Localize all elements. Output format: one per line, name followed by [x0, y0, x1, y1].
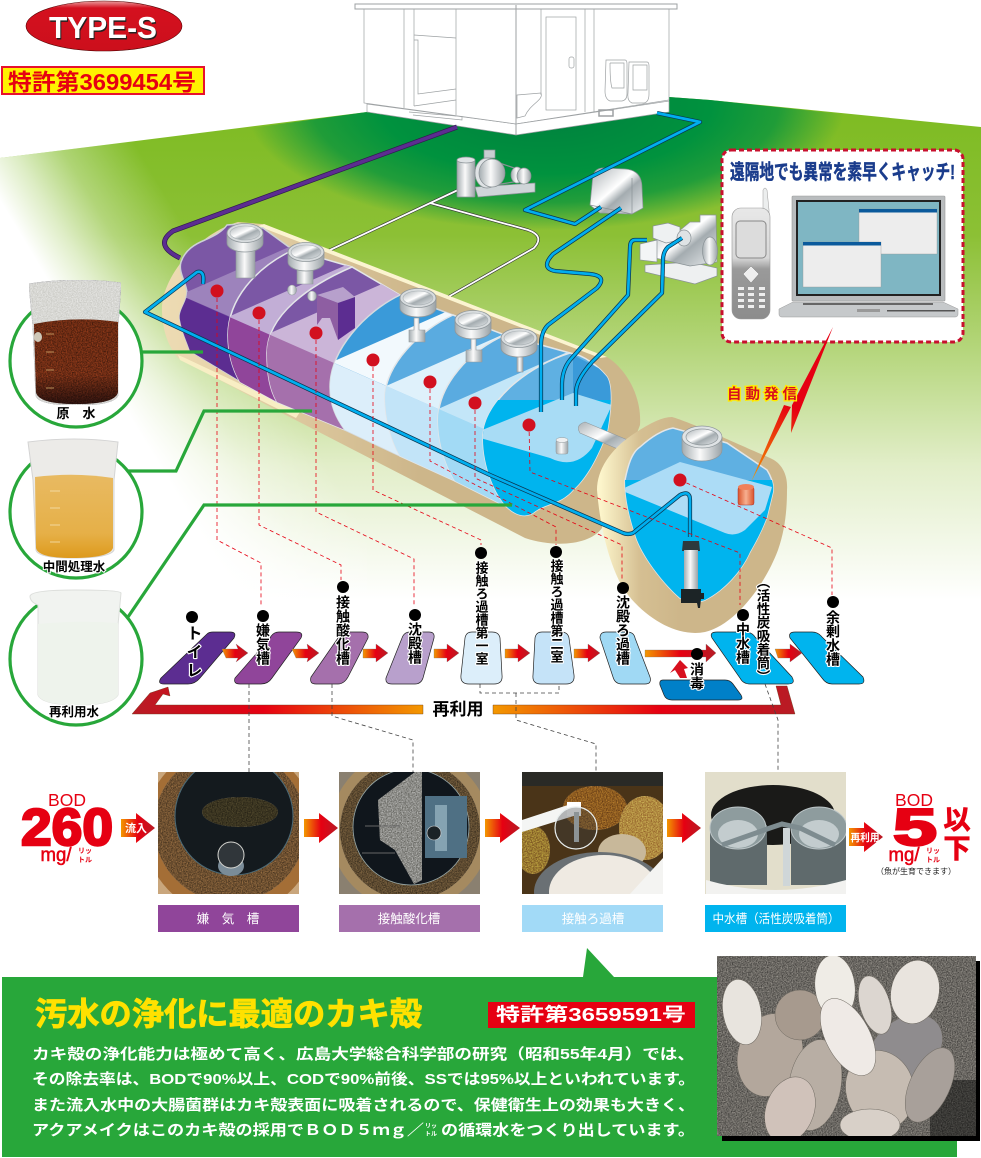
tank chamber 1: raw inflow [179, 223, 290, 381]
tank chamber 5 [384, 314, 503, 482]
panel body text [32, 1045, 695, 1139]
arrow: photo 3 to 4 [667, 813, 701, 843]
remote monitoring callout [722, 150, 963, 342]
panel: oyster shell purification [2, 948, 957, 1157]
flow shape: toilet [160, 632, 235, 684]
patent number badge: 特許第3659591号 [496, 1004, 686, 1025]
arrow: inflow: 流入 [125, 821, 147, 835]
manhole cap 1 [227, 224, 263, 252]
panel body text: また流入水中の大腸菌群はカキ殻表面に吸着されるので、保健衛生上の効果も大きく、 [32, 1096, 695, 1114]
blower unit 1 [457, 150, 535, 197]
flow label: anaerobic tank: 嫌気槽 [255, 622, 271, 666]
panel body text: の循環水をつくり出しています。 [441, 1121, 695, 1139]
beaker: reuse water [10, 590, 142, 725]
flow shape: settling filtration tank [600, 632, 650, 684]
ground pipes: white conduit lines [330, 190, 538, 297]
photo caption: contact oxidation tank [339, 905, 480, 932]
flow shape: contact filtration room 1 [461, 632, 502, 684]
tank chamber 7 [482, 352, 612, 516]
flow shape: contact oxidation tank [311, 632, 368, 684]
outflow BOD figure [876, 790, 970, 876]
small tank manhole [682, 426, 722, 461]
flow shape: surplus water tank [790, 632, 864, 684]
beaker: raw water [10, 280, 142, 427]
connecting pipe between tanks [578, 422, 630, 452]
flow label: surplus water tank: 余剰水槽 [825, 610, 841, 667]
inflow BOD figure: mg/ [40, 845, 72, 866]
disinfectant feed arrow [670, 660, 688, 678]
manhole cap 4 [455, 310, 491, 339]
outflow BOD figure: BOD [895, 790, 933, 810]
beaker: reuse water: 再利用水 [49, 704, 99, 719]
green leader lines from beakers [128, 352, 512, 617]
flow label: toilet: トイレ [184, 625, 202, 680]
inflow BOD figure: 260 [21, 799, 113, 857]
reuse return bar: 再利用 [432, 700, 484, 719]
inflow BOD figure: BOD [48, 790, 86, 810]
outflow BOD figure: トル [926, 857, 940, 864]
patent number box: 特許第3699454号 [8, 69, 196, 95]
flow label: activated carbon cylinder: （活性炭吸着筒） [754, 575, 770, 683]
connector dashes from chambers to flow labels [217, 291, 832, 605]
flow shape: reclaimed water tank [711, 632, 793, 684]
tank chamber 4 [329, 294, 454, 457]
photo caption: reclaimed water tank: 中水槽（活性炭吸着筒） [712, 911, 840, 926]
outflow BOD figure: 5 [893, 799, 937, 857]
panel heading: 汚水の浄化に最適のカキ殻 [35, 996, 422, 1032]
photo: contact oxidation tank [339, 772, 480, 894]
arrow: photo 2 to 3 [485, 813, 520, 843]
photo caption: contact filtration tank [522, 905, 663, 932]
photo caption: contact filtration tank: 接触ろ過槽 [562, 911, 624, 926]
small reuse tank [597, 417, 787, 633]
photo caption: anaerobic tank [158, 905, 299, 932]
outflow BOD figure: mg/ [888, 845, 920, 866]
red float sensor [738, 484, 754, 505]
flow label: disinfection: 消毒 [689, 661, 705, 691]
flow shape: anaerobic tank [235, 632, 302, 684]
flow shape: disinfection tank [660, 680, 742, 700]
arrow: reuse outflow [849, 822, 883, 852]
manhole cap 3 [400, 288, 436, 317]
flow label: settling filtration tank: 沈殿ろ過槽 [615, 594, 631, 666]
flow label: filtration room 1: 接触ろ過槽第一室 [474, 560, 488, 665]
purple inflow pipe [164, 127, 457, 258]
red chamber markers [210, 284, 686, 486]
photo: contact filtration tank with oyster shells [522, 772, 663, 894]
photo: reclaimed water tank with activated carbon [705, 772, 847, 894]
tank chamber 6 [437, 336, 571, 508]
beaker: intermediate water: 中間処理水 [43, 559, 106, 574]
flow shape: contact filtration room 2 [533, 632, 574, 684]
flow label: filtration room 2: 接触ろ過槽第二室 [548, 558, 564, 663]
outflow BOD figure: （魚が生育できます） [876, 866, 956, 876]
arrow: reuse outflow: 再利用 [850, 831, 880, 844]
outflow BOD figure: リッ [926, 848, 940, 855]
beaker: intermediate water [10, 439, 142, 578]
beaker: raw water: 原 水 [56, 406, 96, 421]
small cylinder in chamber 7 [556, 438, 568, 454]
title badge: TYPE-S: TYPE-S [49, 10, 157, 45]
photo: oyster shells [717, 953, 980, 1150]
panel body text: トル [425, 1132, 437, 1138]
septic tank shell [162, 222, 640, 544]
flow label: reclaimed water tank: 中水槽 [735, 621, 751, 665]
flow label: disinfection [689, 648, 705, 691]
label: automatic transmission: 自動発信 [727, 385, 801, 403]
icon: mobile phone [732, 188, 770, 319]
tank chamber 2 [227, 252, 353, 402]
flow dashes to photos [249, 684, 778, 772]
manhole cap 5 [501, 328, 537, 357]
outflow BOD figure: 以 [944, 805, 970, 835]
building wireframe [355, 4, 677, 135]
oxidation block in chamber 3 [317, 287, 355, 340]
photo caption: contact oxidation tank: 接触酸化槽 [378, 911, 440, 926]
inflow BOD figure: トル [78, 857, 92, 864]
outflow BOD figure: 下 [944, 834, 970, 864]
manhole cap 2 [288, 242, 324, 271]
green lawn ground [0, 97, 981, 620]
panel body text: リッ [425, 1124, 437, 1130]
blower hood [590, 168, 643, 214]
arrow: inflow [121, 813, 155, 843]
blue air and water pipes [145, 113, 700, 537]
tank chamber 3 [266, 266, 400, 431]
inflow BOD figure: リッ [78, 848, 92, 855]
photo caption: anaerobic tank: 嫌 気 槽 [197, 911, 259, 926]
icon: laptop showing alert windows [779, 196, 958, 317]
panel body text: カキ殻の浄化能力は極めて高く、広島大学総合科学部の研究（昭和55年4月）では、 [32, 1045, 695, 1063]
lightning bolt signal [751, 327, 833, 482]
panel body text: アクアメイクはこのカキ殻の採用でＢＯＤ５ｍｇ／ [32, 1121, 424, 1139]
flow label: contact oxidation tank: 接触酸化槽 [335, 594, 351, 666]
title badge: TYPE-S: TYPE-S [50, 12, 158, 46]
process flow diagram [132, 546, 864, 772]
manhole stems [236, 250, 523, 372]
arrow: photo 1 to 2 [304, 813, 338, 843]
photo caption: reclaimed water tank [705, 905, 846, 932]
photo: anaerobic tank [158, 772, 299, 894]
flow shape: settling tank [386, 632, 434, 684]
submersible pump [681, 541, 704, 608]
title badge: TYPE-S [26, 1, 182, 51]
reuse return bar [132, 686, 795, 719]
panel body text: その除去率は、BODで90%以上、CODで90%前後、SSでは95%以上といわれています。 [32, 1070, 695, 1088]
flow arrows [222, 644, 802, 662]
patent number badge [488, 1002, 695, 1028]
flow label: settling tank: 沈殿槽 [407, 621, 423, 665]
blower unit 2 [640, 215, 718, 284]
